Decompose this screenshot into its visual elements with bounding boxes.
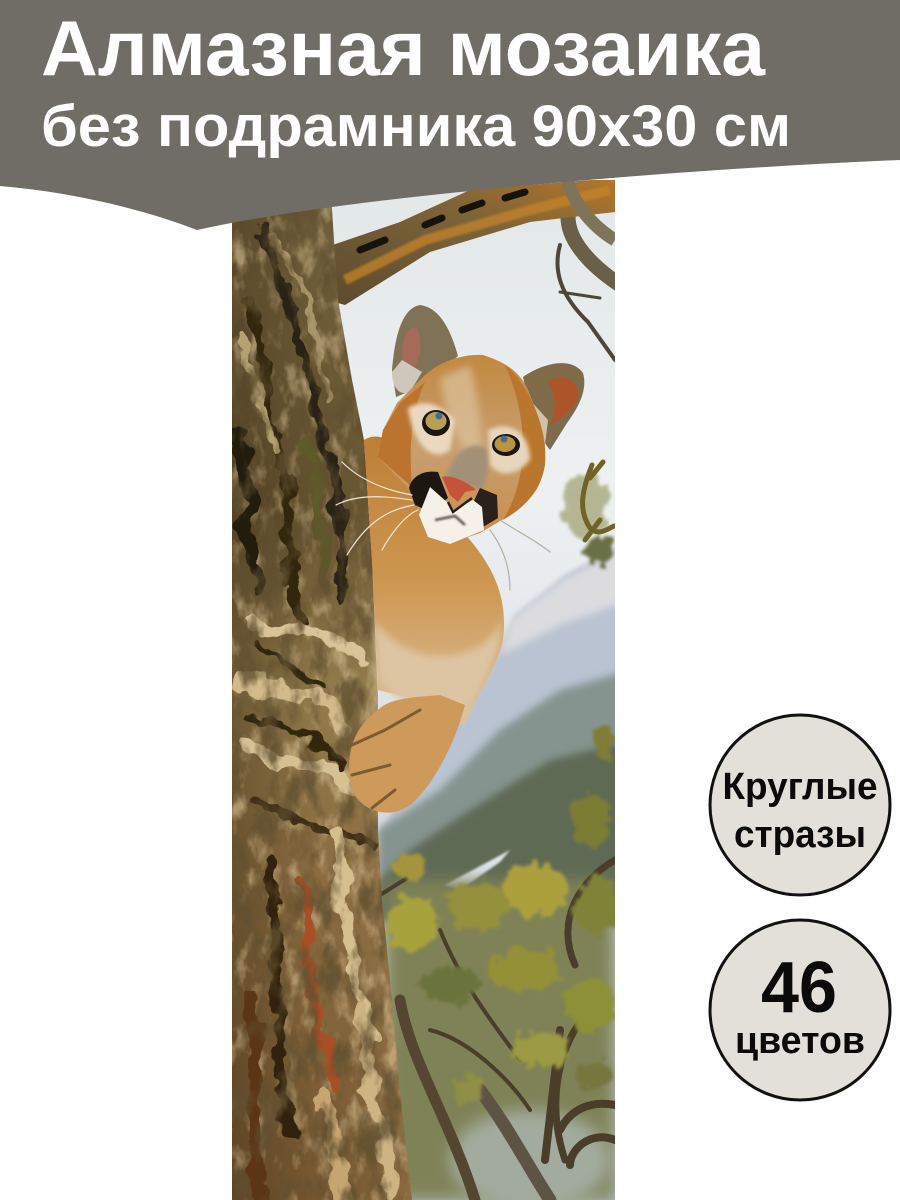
tree trunk [232, 180, 422, 1200]
cougar muzzle and nose [409, 472, 498, 544]
pine forest [380, 725, 620, 1200]
badge: round rhinestones: Круглые [722, 766, 878, 808]
badge: 46 colours [710, 920, 890, 1100]
subtitle: без подрамника 90х30 см [41, 94, 791, 159]
badge: round rhinestones: стразы [734, 814, 866, 856]
pine sprig by the head [561, 462, 615, 566]
title: Алмазная мозаика [41, 4, 766, 92]
badge: 46 colours: цветов [735, 1020, 865, 1062]
whiskers [336, 462, 550, 590]
badge: 46 colours: 46 [761, 948, 837, 1028]
cougar body and paw [349, 436, 504, 813]
cougar eyes [422, 410, 520, 456]
sky and mountain backdrop [332, 180, 615, 1200]
badge: round rhinestones [710, 715, 890, 895]
header banner [0, 0, 900, 230]
cougar ears [392, 305, 584, 450]
cougar head [378, 355, 545, 544]
picture: cougar on a tree [232, 178, 630, 1200]
tree branch [318, 178, 615, 305]
right twig [556, 216, 615, 362]
